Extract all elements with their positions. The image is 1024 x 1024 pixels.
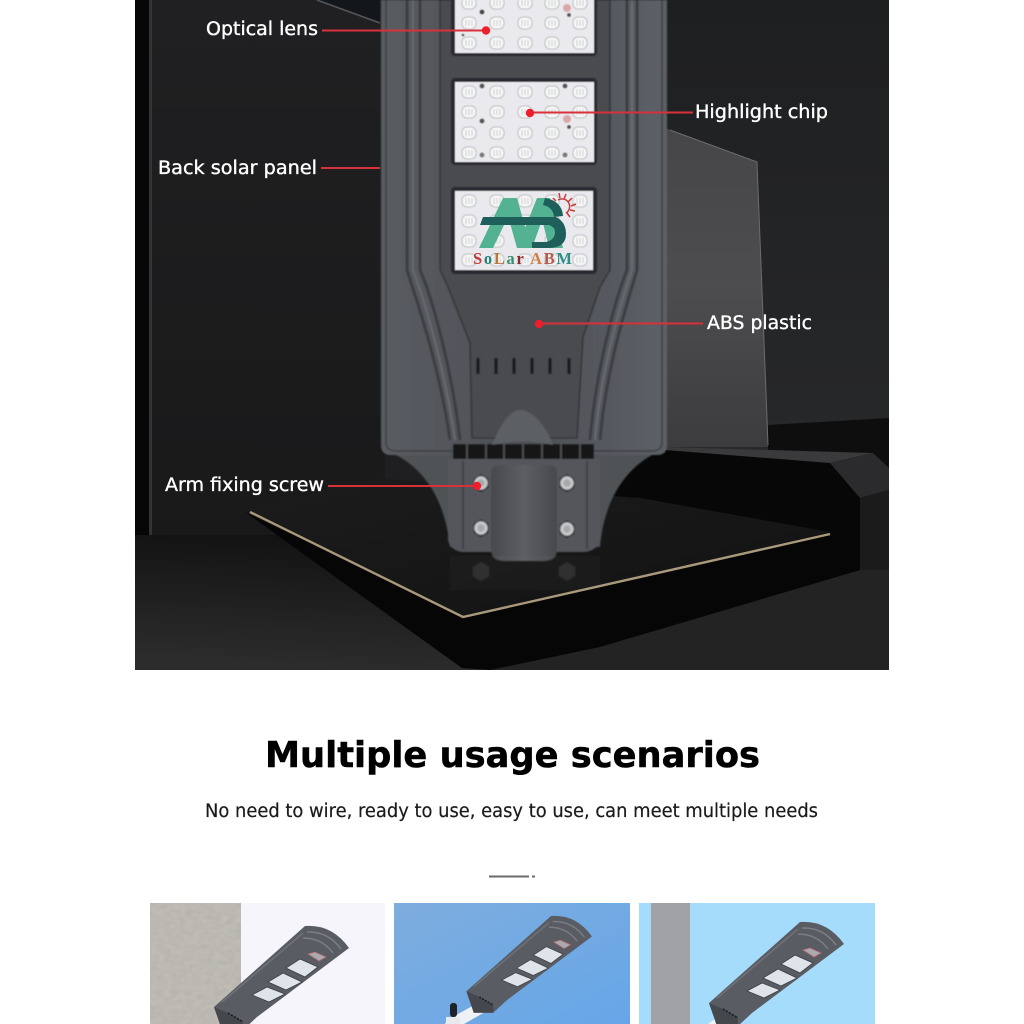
clipped contents	[445, 916, 592, 1024]
right wall shadow band	[768, 418, 889, 470]
callout: optical lens	[206, 19, 490, 40]
callout: ABS plastic: ABS plastic	[707, 313, 812, 334]
sensor	[446, 1003, 460, 1024]
LED module one	[451, 0, 597, 56]
dark product scene	[135, 0, 889, 670]
module frame	[451, 78, 597, 165]
platform top	[245, 478, 830, 617]
chip marks	[462, 4, 571, 36]
concrete pole	[651, 903, 690, 1024]
lower wings	[396, 455, 652, 547]
base strip top	[665, 447, 873, 463]
scenario card: wall mounted	[150, 903, 385, 1024]
dome	[492, 410, 553, 445]
platform front face	[245, 512, 860, 670]
module frame	[451, 187, 597, 274]
card background	[639, 903, 875, 1024]
lamp body	[381, 0, 667, 455]
body outline groove	[386, 0, 662, 451]
callout: arm fixing screw	[165, 475, 481, 496]
vent slots	[478, 358, 569, 374]
scene base	[135, 0, 889, 670]
logo sun	[553, 193, 576, 217]
LED module two	[451, 78, 597, 165]
lower right floor	[490, 570, 889, 670]
callout: back solar panel: Back solar panel	[158, 158, 317, 179]
bolts	[474, 474, 574, 538]
logo dark strokes	[480, 198, 566, 248]
platform gold edge	[250, 512, 830, 617]
callout: highlight chip: Highlight chip	[695, 102, 828, 123]
subheading: No need to wire, ready to use, easy to use, can meet multiple needs	[205, 801, 818, 822]
module plate	[455, 0, 594, 53]
small divider	[489, 876, 535, 878]
callout: ABS plastic	[535, 313, 812, 334]
clipped contents	[708, 922, 844, 1024]
black base block	[600, 447, 889, 572]
concrete wall	[150, 903, 241, 1024]
bracket left rib	[462, 461, 464, 549]
reflected clamp	[450, 556, 600, 590]
right wall	[660, 0, 889, 450]
lamp arm	[445, 1003, 492, 1024]
reflected bolts	[473, 562, 575, 581]
callout: arm fixing screw: Arm fixing screw	[165, 475, 324, 496]
grey back stand	[665, 128, 768, 447]
right ridges	[590, 0, 637, 440]
base block top face	[830, 453, 889, 498]
left black strip	[135, 0, 150, 537]
card background	[394, 903, 630, 1024]
base block front face	[860, 490, 889, 572]
watermark logo	[473, 193, 576, 268]
module plate	[455, 82, 594, 162]
module plate	[455, 191, 593, 270]
right ridge highlights	[595, 0, 632, 440]
stand edge	[670, 130, 768, 445]
callout: optical lens: Optical lens	[206, 19, 318, 40]
left wall	[150, 0, 385, 537]
chip marks	[480, 84, 571, 158]
lamp arm	[708, 1014, 730, 1024]
bracket	[448, 459, 600, 552]
card background	[150, 903, 385, 1024]
bracket right rib	[586, 461, 588, 549]
left ridge highlights	[413, 0, 455, 440]
grille bars	[467, 444, 580, 464]
wall texture	[150, 903, 241, 1024]
logo green strokes	[479, 198, 563, 248]
wedge highlight	[317, 0, 380, 23]
scenario card: pole mounted	[639, 903, 875, 1024]
lamp	[214, 926, 349, 1024]
solar street lamp	[381, 0, 667, 590]
center inset	[440, 0, 610, 438]
upper left dark wedge	[317, 0, 380, 23]
callout: highlight chip	[526, 102, 828, 123]
floor	[135, 535, 889, 670]
wall edge highlight	[149, 0, 152, 537]
lamp	[466, 916, 592, 1013]
left ridges	[407, 0, 460, 440]
heading: Multiple usage scenarios	[265, 735, 760, 776]
lamp	[709, 922, 844, 1024]
module frame	[451, 0, 597, 56]
LED module three	[451, 187, 597, 274]
grille	[453, 444, 594, 464]
logo wordmark: SoLar ABM	[473, 249, 572, 268]
central clamp	[491, 465, 557, 561]
scenario card: blue sky arm	[394, 903, 630, 1024]
